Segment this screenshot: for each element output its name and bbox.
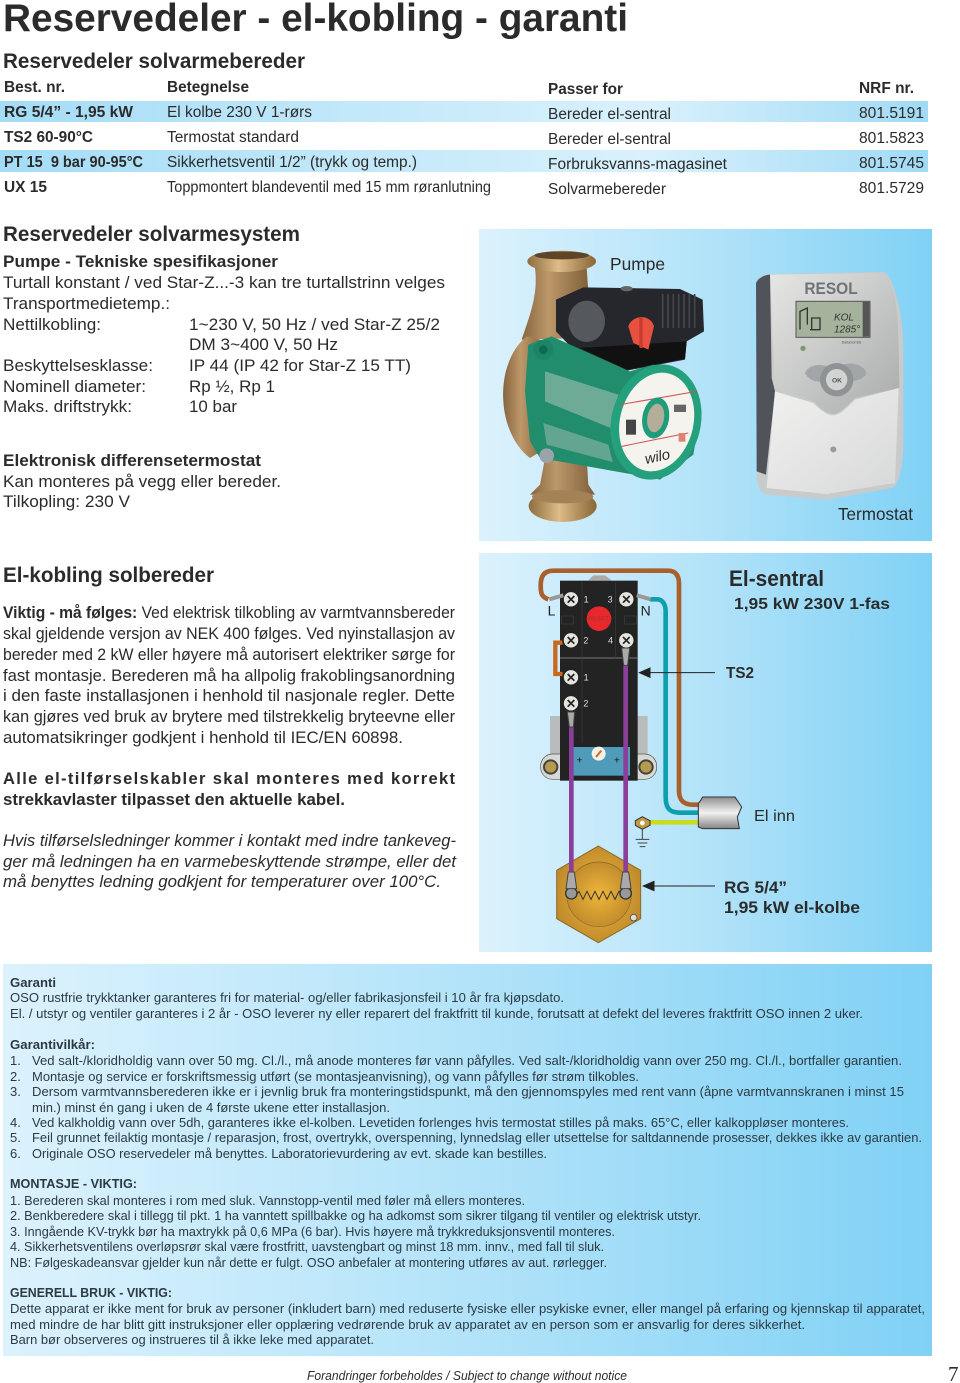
heading: reservedeler solvarmebereder: Reservedeler solvarmebereder	[3, 50, 305, 73]
table row: RG 5/4: 801.5191	[859, 105, 924, 122]
table row: RG 5/4: RG 5/4” - 1,95 kW	[4, 104, 133, 121]
panel: wiring diagram	[479, 553, 932, 952]
text block: garantivilkår: Montasje og service er forskriftsmessig utført (se montasjeanvisning), og vann påfylles før strøm tilkobles.	[32, 1069, 639, 1084]
text block: generell bruk: GENERELL BRUK - VIKTIG:	[10, 1285, 172, 1300]
table row: TS2: Bereder el-sentral	[548, 131, 671, 148]
text block: important wiring note: automatsikringer godkjent i henhold til IEC/EN 60898.	[3, 729, 403, 747]
text block: garanti: OSO rustfrie trykktanker garanteres fri for material- og/eller fabrikasjonsfeil i 10 år fra kjøpsdato.	[10, 990, 564, 1005]
panel: pump and thermostat photos	[479, 229, 932, 541]
table header	[4, 79, 914, 98]
table row: RG 5/4: El kolbe 230 V 1-rørs	[167, 104, 312, 121]
table header: Best. nr.	[4, 79, 65, 96]
table row: PT 15: PT 15 9 bar 90-95°C	[4, 154, 143, 171]
text block: pump specifications: Nominell diameter:	[3, 378, 146, 396]
label: El-sentral	[729, 566, 890, 613]
text block: high temperature cable note: må benyttes ledning godkjent for temperaturer over 100°C.	[3, 873, 441, 891]
text block: pump specifications: Maks. driftstrykk:	[3, 398, 132, 416]
text block: garantivilkår: 4.	[10, 1115, 21, 1130]
text block: montasje: 1. Berederen skal monteres i rom med sluk. Vannstopp-ventil med føler må ellers monteres.	[10, 1193, 525, 1208]
thermostat body TS2: +	[614, 756, 620, 767]
thermostat body TS2: 2	[583, 698, 588, 708]
text block: important wiring note: skal gjeldende versjon av NEK 400 følges. Ved nyinstallasjon av	[3, 625, 456, 643]
text block: garantivilkår: 1.	[10, 1053, 21, 1068]
illustration: RESOL thermostat: KOL	[834, 312, 854, 323]
text block: garantivilkår	[10, 1037, 922, 1161]
thermostat body TS2: 2	[583, 635, 588, 645]
text block: garantivilkår: Ved salt-/kloridholdig vann over 50 mg. Cl./l., må anode monteres før vann påfylles. Ved salt-/kloridholdig vann over 250 mg. Cl./l., bortfaller garantien.	[32, 1053, 902, 1068]
text block: garantivilkår: 5.	[10, 1130, 21, 1145]
text block: electronic thermostat	[3, 452, 281, 511]
text block: garantivilkår: 6.	[10, 1146, 21, 1161]
text block: montasje: 2. Benkberedere skal i tillegg til pkt. 1 ha vanntett spillbakke og ha adkomst som sikrer tilgang til ventiler og elektrisk utstyr.	[10, 1208, 701, 1223]
text block: pump specifications: IP 44 (IP 42 for Star-Z 15 TT)	[189, 357, 411, 375]
text block: generell bruk: Barn bør observeres og instrueres til å ikke leke med apparatet.	[10, 1332, 374, 1347]
thermostat body TS2: 1	[584, 595, 589, 605]
table row: PT 15: Forbruksvanns-magasinet	[548, 156, 728, 173]
text block: high temperature cable note: ger må ledningen ha en varmebeskyttende strømpe, eller det	[3, 853, 457, 871]
text block: generell bruk: med mindre de har blitt gitt instruksjoner eller opplæring vedrørende bruk av apparatet av en person som er ansvarlig for deres sikkerhet.	[10, 1317, 805, 1332]
text block: montasje: MONTASJE - VIKTIG:	[10, 1176, 137, 1191]
table row: PT 15: 801.5745	[859, 155, 924, 172]
text block: montasje: NB: Følgeskadeansvar gjelder kun når dette er fulgt. OSO anbefaler at montering utføres av aut. rørlegger.	[10, 1255, 607, 1270]
text block: pump specifications: 10 bar	[189, 398, 238, 416]
text block: cable strain relief: strekkavlaster tilpasset den aktuelle kabel.	[3, 791, 345, 809]
text block: important wiring note	[3, 604, 456, 747]
text block: important wiring note: fast montasje. Berederen må ha allpolig frakoblingsanordning	[3, 667, 455, 685]
text block: garantivilkår: Garantivilkår:	[10, 1037, 95, 1052]
label: RG 5/4 el-kolbe	[724, 878, 860, 917]
table row: TS2: TS2 60-90°C	[4, 129, 93, 146]
terminal screws	[563, 591, 634, 711]
text block: pump specifications: DM 3~400 V, 50 Hz	[189, 336, 338, 354]
label: L and N	[548, 603, 651, 619]
label: El-sentral: 1,95 kW 230V 1-fas	[734, 596, 890, 613]
thermostat body TS2: 1	[584, 673, 589, 683]
label: L and N: L	[548, 603, 556, 619]
text block: pump specifications: Pumpe - Tekniske spesifikasjoner	[3, 253, 279, 271]
table row: PT 15: Sikkerhetsventil 1/2” (trykk og temp.)	[167, 154, 417, 171]
table row: RG 5/4: Bereder el-sentral	[548, 106, 671, 123]
text block: pump specifications: Rp ½, Rp 1	[189, 378, 275, 396]
table: spare parts	[0, 79, 928, 198]
thermostat mounting	[541, 575, 657, 779]
text block: electronic thermostat: Elektronisk differensetermostat	[3, 452, 262, 470]
text block: high temperature cable note: Hvis tilførselsledninger kommer i kontakt med indre tankeveg-	[3, 832, 457, 850]
text block: montasje	[10, 1176, 701, 1270]
text block: garantivilkår: Ved kalkholdig vann over 5dh, garanteres ikke el-kolben. Levetiden forlenges hvis termostat stilles på maks. 65°C, eller kalkoppløser monteres.	[32, 1115, 849, 1130]
text block: generell bruk	[10, 1285, 925, 1347]
wires: purple	[571, 665, 626, 872]
panel: warranty and installation	[3, 964, 932, 1356]
label: RG 5/4 el-kolbe: 1,95 kW el-kolbe	[724, 898, 860, 917]
footer note: Forandringer forbeholdes / Subject to change without notice	[307, 1369, 627, 1383]
table row: PT 15	[4, 154, 924, 173]
text block: important wiring note: kan gjøres ved bruk av brytere med tilstrekkelig bryteevne eller	[3, 708, 455, 726]
text block: electronic thermostat: Tilkopling: 230 V	[3, 493, 130, 511]
table row: UX 15: 801.5729	[859, 180, 924, 197]
table row: TS2: Termostat standard	[167, 129, 299, 146]
thermostat body TS2: 4	[608, 635, 613, 645]
label: Pumpe: Pumpe	[610, 254, 665, 274]
text block: important wiring note: i den faste installasjonen i henhold til nasjonale regler. Dette	[3, 687, 455, 705]
text block: pump specifications: 1~230 V, 50 Hz / ved Star-Z 25/2	[189, 316, 440, 334]
text block: garantivilkår: Dersom varmtvannsberederen ikke er i jevnlig bruk fra monteringstidspunkt, må den gjennomspyles med rent vann (åpne varmtvannskranen i minst 15	[32, 1084, 904, 1099]
jumper	[555, 643, 563, 674]
label: RG 5/4 el-kolbe: RG 5/4”	[724, 878, 787, 897]
text block: garantivilkår: Feil grunnet feilaktig montasje / reparasjon, frost, overtrykk, overspenning, lynnedslag eller utsettelse for saltdannende prosesser, dekkes ikke av garantien.	[32, 1130, 922, 1145]
thermostat body TS2: 3	[608, 595, 613, 605]
row band 3	[0, 150, 928, 172]
illustration: RESOL thermostat: 1285°	[834, 324, 860, 335]
text block: montasje: 3. Inngående KV-trykk bør ha maxtrykk på 0,6 MPa (6 bar). Hvis høyere må trykkreduksjonsventil monteres.	[10, 1224, 615, 1239]
label: Termostat: Termostat	[838, 504, 913, 524]
text block: garanti: Garanti	[10, 975, 56, 990]
ring terminals	[566, 648, 631, 889]
arrow to heating element	[643, 881, 715, 891]
illustration: circulation pump	[503, 251, 713, 522]
illustration: RESOL thermostat: RESOL	[804, 279, 858, 298]
label: L and N: N	[641, 603, 651, 619]
text block: garanti	[10, 975, 863, 1021]
text block: pump specifications: Turtall konstant / ved Star-Z...-3 kan tre turtallstrinn velges	[3, 274, 445, 292]
diagram: thermostat wiring	[541, 571, 742, 943]
text block: high temperature cable note	[3, 832, 457, 891]
table row: UX 15: UX 15	[4, 179, 47, 196]
table header: Betegnelse	[167, 79, 249, 96]
text block: cable strain relief: Alle el-tilførselskabler skal monteres med korrekt	[3, 770, 456, 788]
table row: UX 15	[4, 179, 924, 198]
table header: Passer for	[548, 81, 623, 98]
text block: pump specifications: Nettilkobling:	[3, 316, 101, 334]
text block: important wiring note: bereder med 2 kW eller høyere må autorisert elektriker sørge for	[3, 646, 455, 664]
text block: pump specifications	[3, 253, 445, 416]
table row: UX 15: Toppmontert blandeventil med 15 mm røranlutning	[167, 179, 491, 196]
heading: el-kobling solbereder: El-kobling solbereder	[3, 564, 214, 587]
text block: garantivilkår: 3.	[10, 1084, 21, 1099]
thermostat body TS2	[560, 581, 638, 781]
table header: NRF nr.	[859, 80, 914, 97]
text block: garantivilkår: Originale OSO reservedeler må benyttes. Laboratorievurdering av evt. skade kan bestilles.	[32, 1146, 547, 1161]
illustration: circulation pump: wilo	[644, 447, 672, 468]
label: El-sentral: El-sentral	[729, 566, 824, 591]
arrow to TS2	[639, 668, 715, 677]
text block: electronic thermostat: Kan monteres på vegg eller bereder.	[3, 473, 281, 491]
cable	[698, 797, 742, 829]
table row: RG 5/4	[4, 104, 924, 123]
wires: brown and blue	[541, 571, 702, 822]
table row: UX 15: Solvarmebereder	[548, 181, 666, 198]
text block: garantivilkår: 2.	[10, 1069, 21, 1084]
ground symbol	[635, 817, 650, 847]
row band 1	[0, 101, 928, 122]
illustration: RESOL thermostat	[756, 272, 903, 500]
text block: montasje: 4. Sikkerhetsventilens overløpsrør skal være frostfritt, uavstengbart og minst 18 mm. innv., med fall til sluk.	[10, 1239, 604, 1254]
label: El inn: El inn	[754, 808, 795, 825]
text block: cable strain relief	[3, 770, 456, 809]
heading: reservedeler solvarmesystem: Reservedeler solvarmesystem	[3, 223, 300, 246]
illustration: RESOL thermostat: DeltaSol BS	[842, 341, 862, 345]
text block: pump specifications: Beskyttelsesklasse:	[3, 357, 153, 375]
text block: garantivilkår: min.) minst én gang i uken de 4 første ukene etter installasjon.	[32, 1100, 390, 1115]
thermostat body TS2: +	[577, 756, 583, 767]
text block: important wiring note: Viktig - må følges: Ved elektrisk tilkobling av varmtvannsbereder	[3, 604, 455, 622]
thermostat body TS2: RESET	[589, 617, 609, 623]
label: TS2: TS2	[726, 665, 754, 682]
table row: TS2	[4, 129, 924, 148]
table row: TS2: 801.5823	[859, 130, 924, 147]
text block: generell bruk: Dette apparat er ikke ment for bruk av personer (inkludert barn) med reduserte fysiske eller psykiske evner, eller mangel på erfaring og kjennskap til apparatet,	[10, 1301, 925, 1316]
illustration: RESOL thermostat: OK	[832, 377, 842, 384]
text block: garanti: El. / utstyr og ventiler garanteres i 2 år - OSO leverer ny eller reparert del fraktfritt til kunde, forutsatt at defekt del leveres fraktfritt OSO innen 2 uker.	[10, 1006, 863, 1021]
heating element RG 5/4	[557, 846, 641, 943]
text block: pump specifications: Transportmedietemp.:	[3, 295, 170, 313]
